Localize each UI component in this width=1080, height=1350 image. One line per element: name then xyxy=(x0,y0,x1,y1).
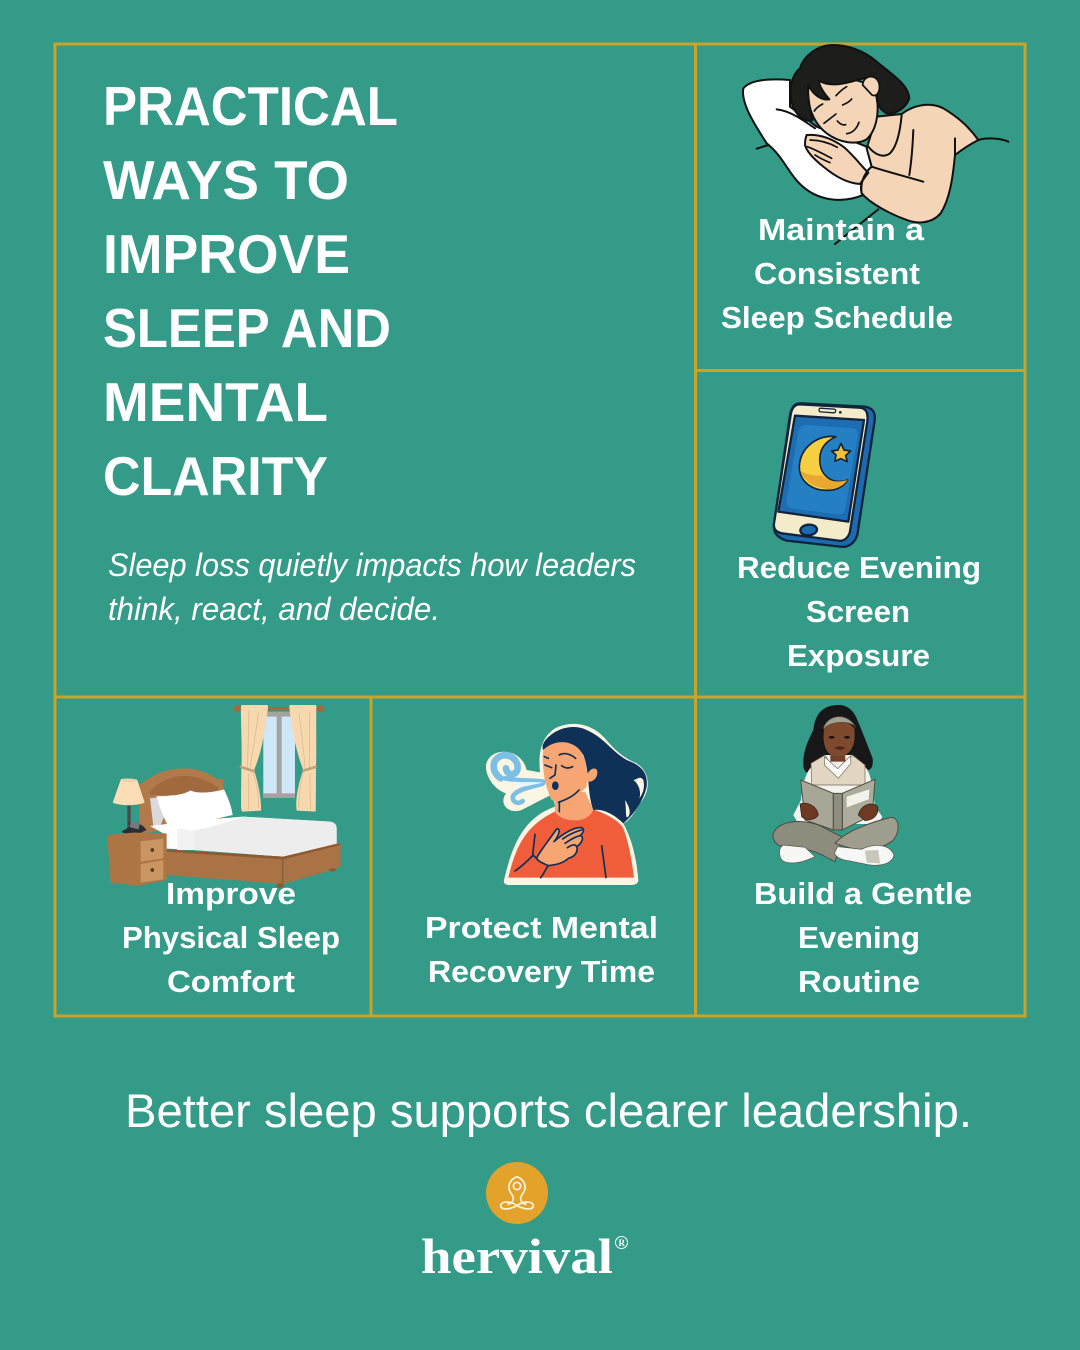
icon: woman reading xyxy=(773,705,898,865)
title: CLARITY xyxy=(103,445,328,507)
label: maintain schedule: Sleep Schedule xyxy=(721,301,953,335)
label: improve comfort: Comfort xyxy=(167,965,295,999)
label: reduce screen: Reduce Evening xyxy=(737,551,981,585)
label: reduce screen: Screen xyxy=(806,595,910,629)
label: gentle routine: Build a Gentle xyxy=(754,877,972,911)
icon: bed and window xyxy=(107,705,341,888)
logo: R xyxy=(618,1238,626,1248)
title: IMPROVE xyxy=(103,223,350,285)
subtitle xyxy=(108,547,636,627)
title: MENTAL xyxy=(103,371,328,433)
label: maintain schedule: Maintain a xyxy=(758,213,925,247)
title xyxy=(103,75,398,507)
label: protect recovery: Protect Mental xyxy=(425,911,658,945)
label: maintain schedule: Consistent xyxy=(754,257,920,291)
title: WAYS TO xyxy=(103,149,349,211)
subtitle: think, react, and decide. xyxy=(108,591,440,627)
icon: phone with moon xyxy=(774,403,875,547)
title: SLEEP AND xyxy=(103,297,391,359)
label: reduce screen: Exposure xyxy=(787,639,930,673)
label: protect recovery xyxy=(425,911,658,989)
label: maintain schedule xyxy=(721,213,953,335)
label: gentle routine xyxy=(754,877,972,999)
label: improve comfort: Physical Sleep xyxy=(122,921,340,955)
icon: woman breathing xyxy=(486,724,648,885)
label: improve comfort xyxy=(122,877,340,999)
title: PRACTICAL xyxy=(103,75,398,137)
label: protect recovery: Recovery Time xyxy=(428,955,655,989)
logo: hervival xyxy=(421,1228,613,1284)
label: gentle routine: Routine xyxy=(798,965,920,999)
icon: sleeping woman xyxy=(743,45,1008,244)
subtitle: Sleep loss quietly impacts how leaders xyxy=(108,547,636,583)
label: gentle routine: Evening xyxy=(798,921,920,955)
logo xyxy=(421,1162,628,1284)
label: improve comfort: Improve xyxy=(166,877,296,911)
closing statement: Better sleep supports clearer leadership. xyxy=(125,1084,972,1137)
label: reduce screen xyxy=(737,551,981,673)
